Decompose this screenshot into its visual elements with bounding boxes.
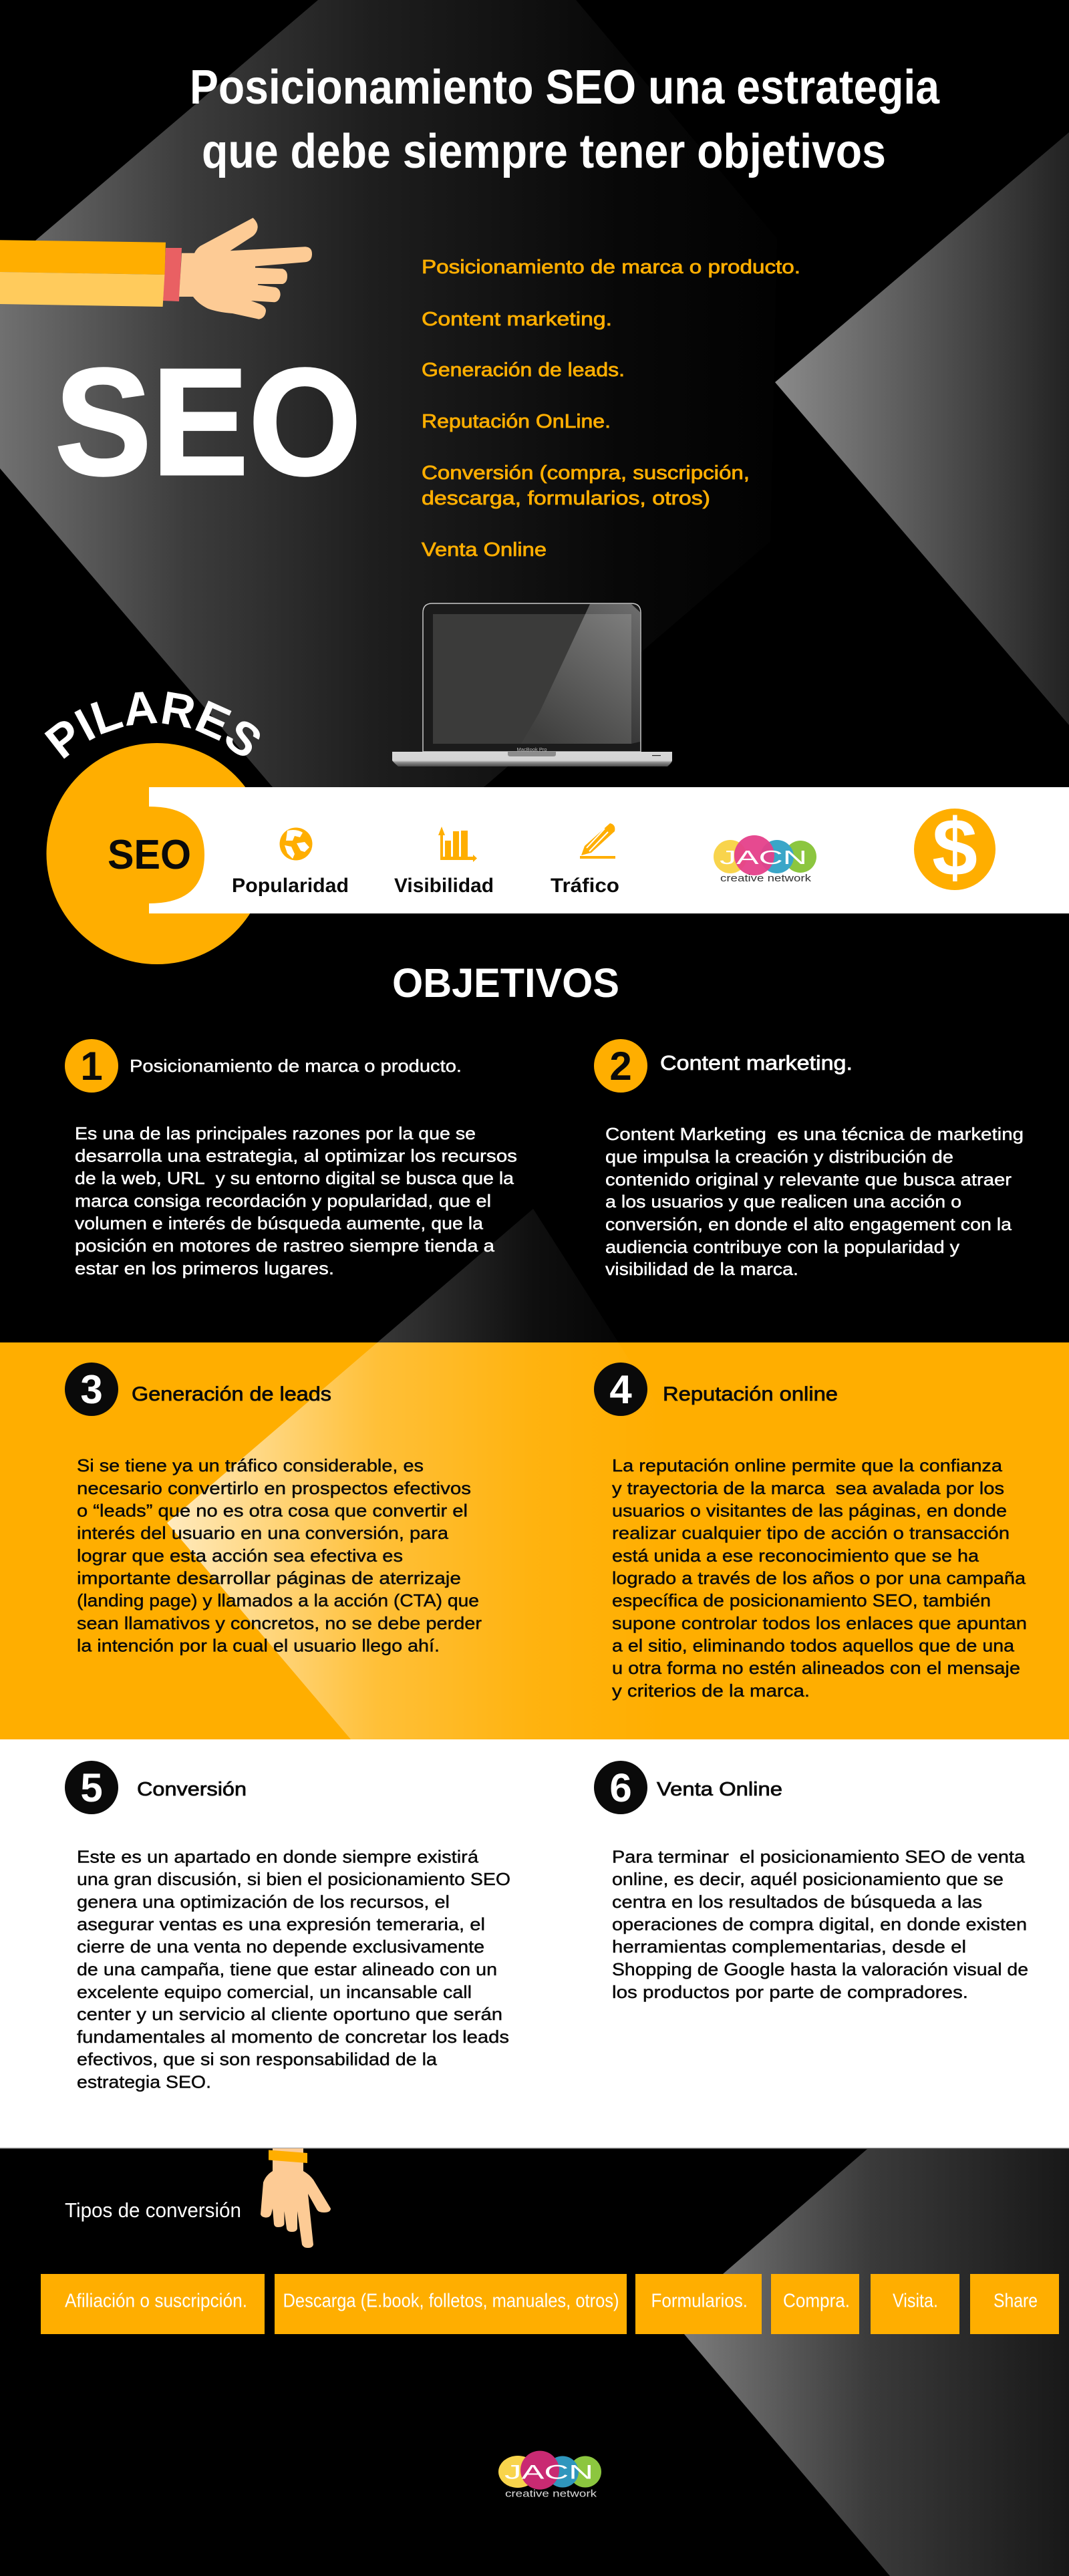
icon: pencil (580, 823, 615, 859)
paragraph 3: o “leads” que no es otra cosa que convertir el (77, 1501, 468, 1521)
paragraph 2: Content Marketing es una técnica de marketing (605, 1124, 1024, 1144)
box: Share: Share (994, 2291, 1038, 2312)
paragraph 5: una gran discusión, si bien el posicionamiento SEO (77, 1869, 510, 1889)
title (190, 61, 940, 178)
label: Tráfico: Tráfico (551, 875, 619, 897)
number badge 3 (65, 1363, 118, 1416)
box: Compra (771, 2274, 859, 2334)
paragraph 6 (612, 1847, 1028, 2002)
icon: globe (279, 827, 313, 861)
paragraph 5: efectivos, que si son responsabilidad de la (77, 2049, 438, 2069)
paragraph 4: realizar cualquier tipo de acción o transacción (612, 1523, 1010, 1543)
label: Popularidad: Popularidad (232, 875, 349, 897)
paragraph 4: específica de posicionamiento SEO, también (612, 1590, 991, 1610)
box: Afiliación: Afiliación o suscripción. (65, 2291, 247, 2312)
background shape: right wedge (775, 132, 1069, 725)
panel: objective 1 (65, 1039, 517, 1278)
paragraph 6: los productos por parte de compradores. (612, 1982, 968, 2002)
background shape: large hexagon (0, 0, 777, 787)
icon: laptop (392, 603, 672, 766)
number badge 5 (65, 1761, 118, 1814)
SEO inner badge (108, 807, 204, 903)
band: orange section (0, 1342, 1069, 1739)
paragraph 3: interés del usuario en una conversión, para (77, 1523, 449, 1543)
title: que debe siempre tener objetivos (202, 125, 886, 178)
number badge 5: 5 (80, 1765, 103, 1810)
icon: laptop: MacBook Pro (516, 746, 547, 752)
logo: JACN footer (498, 2451, 601, 2500)
objectives list: Reputación OnLine. (422, 411, 611, 432)
paragraph 1: estar en los primeros lugares. (75, 1258, 334, 1278)
box: Visita (871, 2274, 959, 2334)
box: Formularios (635, 2274, 762, 2334)
heading 1: Posicionamiento de marca o producto. (130, 1056, 462, 1076)
background shape: lower wedge (668, 2149, 1069, 2576)
panel: objective 6 (594, 1761, 1028, 2002)
number badge 3: 3 (80, 1367, 103, 1412)
box: Descarga: Descarga (E.book, folletos, manuales, otros) (283, 2291, 619, 2312)
paragraph 1: marca consiga recordación y popularidad, que el (75, 1191, 491, 1211)
objectives list (422, 257, 800, 561)
logo: JACN footer: JACN (504, 2462, 593, 2483)
paragraph 1: Es una de las principales razones por la que se (75, 1123, 476, 1143)
panel: objective 3 (65, 1363, 482, 1656)
paragraph 3 (77, 1455, 482, 1656)
logo: JACN: JACN (720, 847, 807, 869)
number badge 6 (594, 1761, 647, 1814)
band: white section (0, 1739, 1069, 2148)
paragraph 5: genera una optimización de los recursos, el (77, 1892, 450, 1912)
icon: dollar coin (914, 802, 996, 893)
objectives list: descarga, formularios, otros) (422, 488, 710, 509)
number badge 4 (594, 1363, 647, 1416)
paragraph 3: importante desarrollar páginas de aterrizaje (77, 1568, 461, 1588)
number badge 1 (65, 1039, 118, 1093)
paragraph 5: estrategia SEO. (77, 2071, 211, 2092)
paragraph 3: necesario convertirlo en prospectos efectivos (77, 1478, 471, 1498)
paragraph 6: online, es decir, aquél posicionamiento que se (612, 1869, 1004, 1889)
heading 2: Content marketing. (660, 1051, 853, 1075)
paragraph 5: de una campaña, tiene que estar alineado con un (77, 1959, 497, 1979)
paragraph 6: Shopping de Google hasta la valoración visual de (612, 1959, 1028, 1979)
paragraph 4: y trayectoria de la marca sea avalada por los (612, 1478, 1004, 1498)
heading: Tipos de conversión: Tipos de conversión (65, 2198, 241, 2222)
paragraph 4: y criterios de la marca. (612, 1681, 810, 1701)
paragraph 4: supone controlar todos los enlaces que apuntan (612, 1613, 1027, 1633)
objectives list: Conversión (compra, suscripción, (422, 462, 750, 484)
objectives list: Venta Online (422, 539, 547, 561)
paragraph 4: La reputación online permite que la confianza (612, 1455, 1003, 1475)
background shape: central light hexagon (167, 1209, 708, 1739)
paragraph 5: center y un servicio al cliente oportuno que serán (77, 2004, 502, 2024)
paragraph 1: de la web, URL y su entorno digital se busca que la (75, 1168, 514, 1188)
curved heading: PILARES: PILARES (44, 692, 260, 759)
panel: pillars band (108, 787, 1069, 913)
paragraph 4 (612, 1455, 1027, 1701)
logo: JACN footer: creative network (505, 2488, 597, 2500)
paragraph 4: u otra forma no estén alineados con el mensaje (612, 1658, 1020, 1678)
paragraph 4: a el sitio, eliminando todos aquellos que de una (612, 1636, 1015, 1656)
paragraph 5: excelente equipo comercial, un incansable call (77, 1982, 472, 2002)
panel: objective 5 (65, 1761, 510, 2092)
paragraph 6: centra en los resultados de búsqueda a las (612, 1892, 982, 1912)
paragraph 6: Para terminar el posicionamiento SEO de venta (612, 1847, 1026, 1867)
paragraph 4: está unida a ese reconocimiento que se ha (612, 1546, 979, 1566)
box: Formularios: Formularios. (651, 2291, 748, 2312)
paragraph 5: asegurar ventas es una expresión temeraria, el (77, 1914, 485, 1934)
objectives list: Posicionamiento de marca o producto. (422, 257, 800, 278)
paragraph 3: lograr que esta acción sea efectiva es (77, 1546, 403, 1566)
paragraph 2 (605, 1124, 1024, 1279)
label: Visibilidad: Visibilidad (394, 875, 494, 897)
icon: bar chart with arrows (438, 827, 477, 862)
paragraph 2: contenido original y relevante que busca atraer (605, 1169, 1012, 1189)
paragraph 5: fundamentales al momento de concretar los leads (77, 2027, 509, 2047)
paragraph 1: posición en motores de rastreo siempre tienda a (75, 1236, 495, 1256)
paragraph 2: que impulsa la creación y distribución de (605, 1147, 953, 1167)
box: Descarga (275, 2274, 627, 2334)
objectives list: Generación de leads. (422, 360, 625, 381)
paragraph 2: conversión, en donde el alto engagement con la (605, 1214, 1012, 1234)
paragraph 6: herramientas complementarias, desde el (612, 1937, 966, 1957)
number badge 2 (594, 1039, 647, 1093)
SEO inner badge: SEO (108, 832, 191, 878)
paragraph 3: la intención por la cual el usuario llego ahí. (77, 1636, 440, 1656)
big SEO wordmark: SEO (55, 337, 361, 507)
box: Compra: Compra. (783, 2291, 850, 2312)
paragraph 5 (77, 1847, 510, 2092)
box: Share (970, 2274, 1059, 2334)
panel: objective 2 (594, 1039, 1024, 1279)
heading 4: Reputación online (663, 1383, 838, 1405)
paragraph 4: usuarios o visitantes de las páginas, en donde (612, 1501, 1007, 1521)
panel: objective 4 (594, 1363, 1027, 1701)
box: Visita: Visita. (893, 2291, 938, 2312)
paragraph 2: visibilidad de la marca. (605, 1259, 798, 1279)
heading 6: Venta Online (657, 1779, 782, 1800)
pillars circle (47, 743, 267, 964)
icon: pointing hand with sleeve (0, 218, 312, 319)
number badge 2: 2 (609, 1044, 632, 1089)
paragraph 3: (landing page) y llamados a la acción (CTA) que (77, 1590, 479, 1610)
box: Afiliación (41, 2274, 265, 2334)
logo: JACN (714, 835, 816, 884)
paragraph 3: sean llamativos y concretos, no se debe perder (77, 1613, 482, 1633)
paragraph 2: a los usuarios y que realicen una acción o (605, 1191, 961, 1211)
paragraph 5: Este es un apartado en donde siempre existirá (77, 1847, 479, 1867)
panel: conversion types (41, 2274, 1059, 2334)
number badge 4: 4 (609, 1367, 632, 1412)
logo: JACN: creative network (720, 873, 812, 884)
number badge 1: 1 (80, 1044, 103, 1089)
title: Posicionamiento SEO una estrategia (190, 61, 940, 114)
paragraph 3: Si se tiene ya un tráfico considerable, es (77, 1455, 424, 1475)
paragraph 4: logrado a través de los años o por una campaña (612, 1568, 1026, 1588)
paragraph 6: operaciones de compra digital, en donde existen (612, 1914, 1027, 1934)
heading 5: Conversión (137, 1779, 247, 1800)
paragraph 1 (75, 1123, 517, 1278)
heading 3: Generación de leads (132, 1383, 331, 1405)
heading: OBJETIVOS: OBJETIVOS (392, 960, 619, 1006)
paragraph 2: audiencia contribuye con la popularidad y (605, 1237, 959, 1257)
icon: hand pointing down (261, 2148, 331, 2248)
paragraph 1: desarrolla una estrategia, al optimizar los recursos (75, 1145, 517, 1165)
paragraph 1: volumen e interés de búsqueda aumente, que la (75, 1213, 484, 1234)
objectives list: Content marketing. (422, 309, 612, 330)
number badge 6: 6 (609, 1765, 632, 1810)
paragraph 5: cierre de una venta no depende exclusivamente (77, 1937, 484, 1957)
icon: dollar coin: $ (932, 802, 977, 893)
